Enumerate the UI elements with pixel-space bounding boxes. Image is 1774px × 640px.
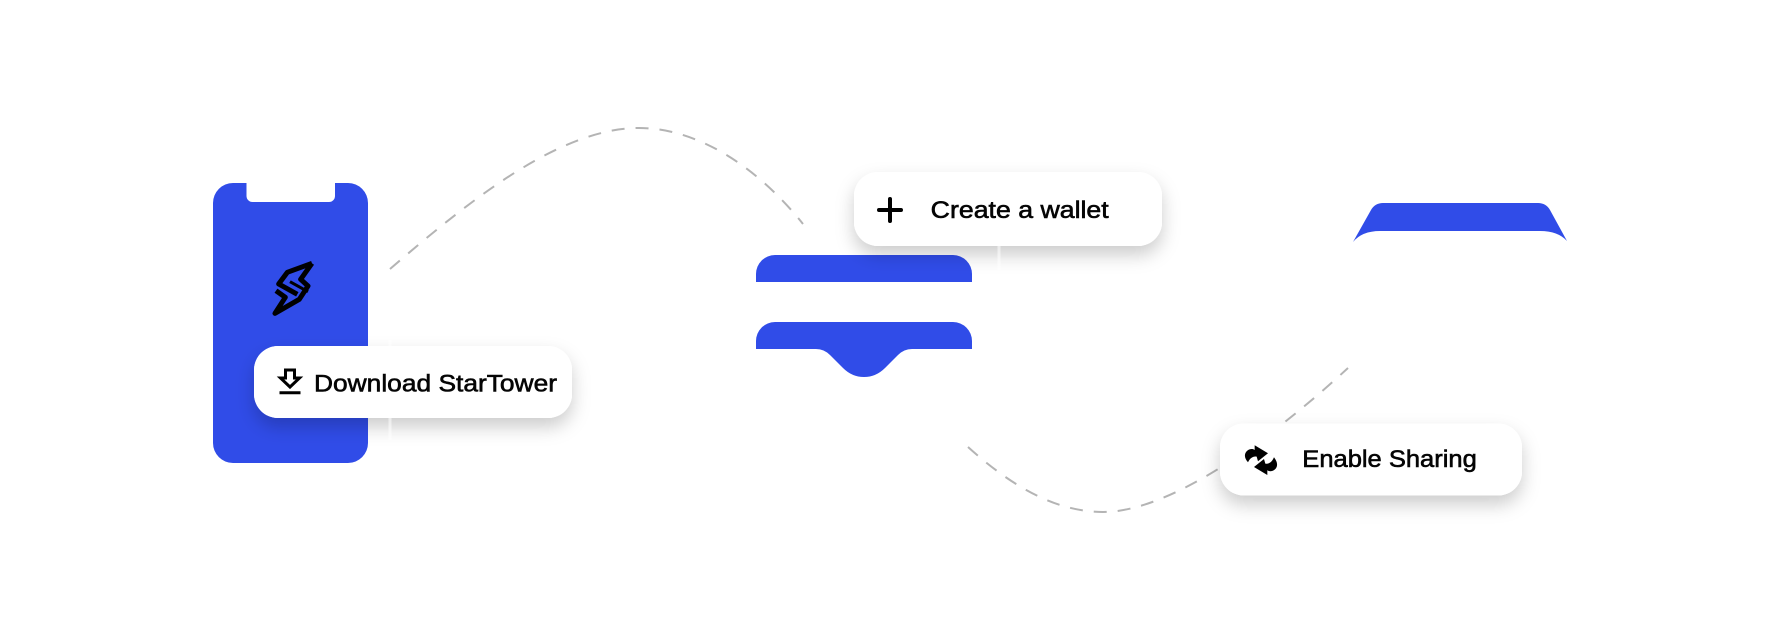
dashed connector: wallet to sharing [968, 368, 1348, 512]
card: download [254, 340, 572, 440]
icon: download [280, 370, 300, 393]
icon: bolt logo [275, 263, 312, 313]
dashed connector: phone to wallet [390, 128, 803, 269]
icon: sharing arrows [1245, 445, 1277, 475]
top-right blue shape [1353, 203, 1567, 242]
label: download: Download StarTower [314, 371, 557, 398]
card: create wallet [854, 172, 1162, 270]
phone [213, 183, 368, 463]
card: enable sharing [1220, 424, 1522, 496]
icon: plus [879, 199, 901, 221]
label: create wallet: Create a wallet [931, 197, 1109, 224]
phone body [213, 183, 368, 463]
wallet bars [756, 255, 972, 377]
wallet lower bar with tab [756, 322, 972, 377]
label: enable sharing: Enable Sharing [1302, 446, 1477, 473]
wallet top bar [756, 255, 972, 282]
